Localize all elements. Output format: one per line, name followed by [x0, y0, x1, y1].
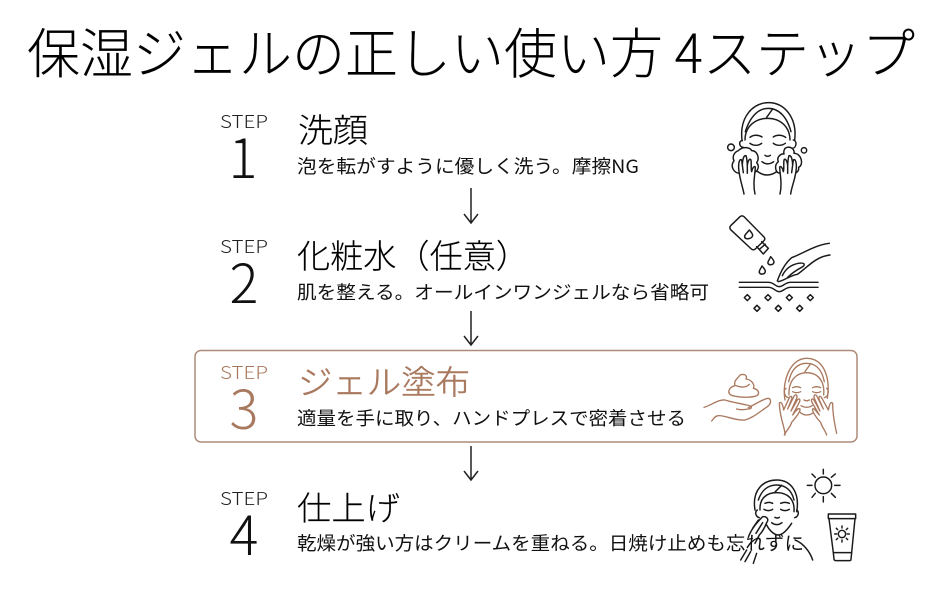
- arrow 3 to 4: [464, 446, 478, 480]
- icon: foam on hand and face: [704, 358, 837, 435]
- step 3 description: 適量を手に取り、ハンドプレスで密着させる: [297, 405, 686, 431]
- step 1: [220, 103, 807, 194]
- panel: step 3 highlighted: [195, 350, 857, 445]
- step 4 heading: 仕上げ: [297, 482, 400, 530]
- step 2: [220, 216, 830, 319]
- step 1 label: STEP: [220, 108, 268, 134]
- icon: toner bottle and skin: [730, 216, 830, 311]
- step 1 heading: 洗顔: [298, 104, 368, 152]
- step 4 number: 4: [230, 492, 258, 571]
- step 4: [220, 469, 856, 571]
- step 1 description: 泡を転がすように優しく洗う。摩擦NG: [297, 153, 639, 179]
- panel border: [195, 350, 857, 442]
- arrow 2 to 3: [464, 311, 478, 345]
- title: 保湿ジェルの正しい使い方 4ステップ: [27, 10, 915, 89]
- step 2 number: 2: [230, 240, 258, 319]
- icon: face, sun and sunscreen: [741, 469, 856, 563]
- step 1 number: 1: [229, 115, 257, 194]
- step 3 heading: ジェル塗布: [298, 356, 470, 404]
- step 4 description: 乾燥が強い方はクリームを重ねる。日焼け止めも忘れずに: [297, 530, 804, 556]
- step 2 heading: 化粧水（任意）: [297, 230, 529, 278]
- step 3 label: STEP: [220, 359, 268, 385]
- step 4 label: STEP: [220, 485, 268, 511]
- icon: face washing: [728, 103, 807, 194]
- step 3 number: 3: [230, 366, 258, 445]
- arrow 1 to 2: [464, 188, 478, 223]
- step 2 label: STEP: [220, 233, 268, 259]
- step 2 description: 肌を整える。オールインワンジェルなら省略可: [297, 279, 709, 305]
